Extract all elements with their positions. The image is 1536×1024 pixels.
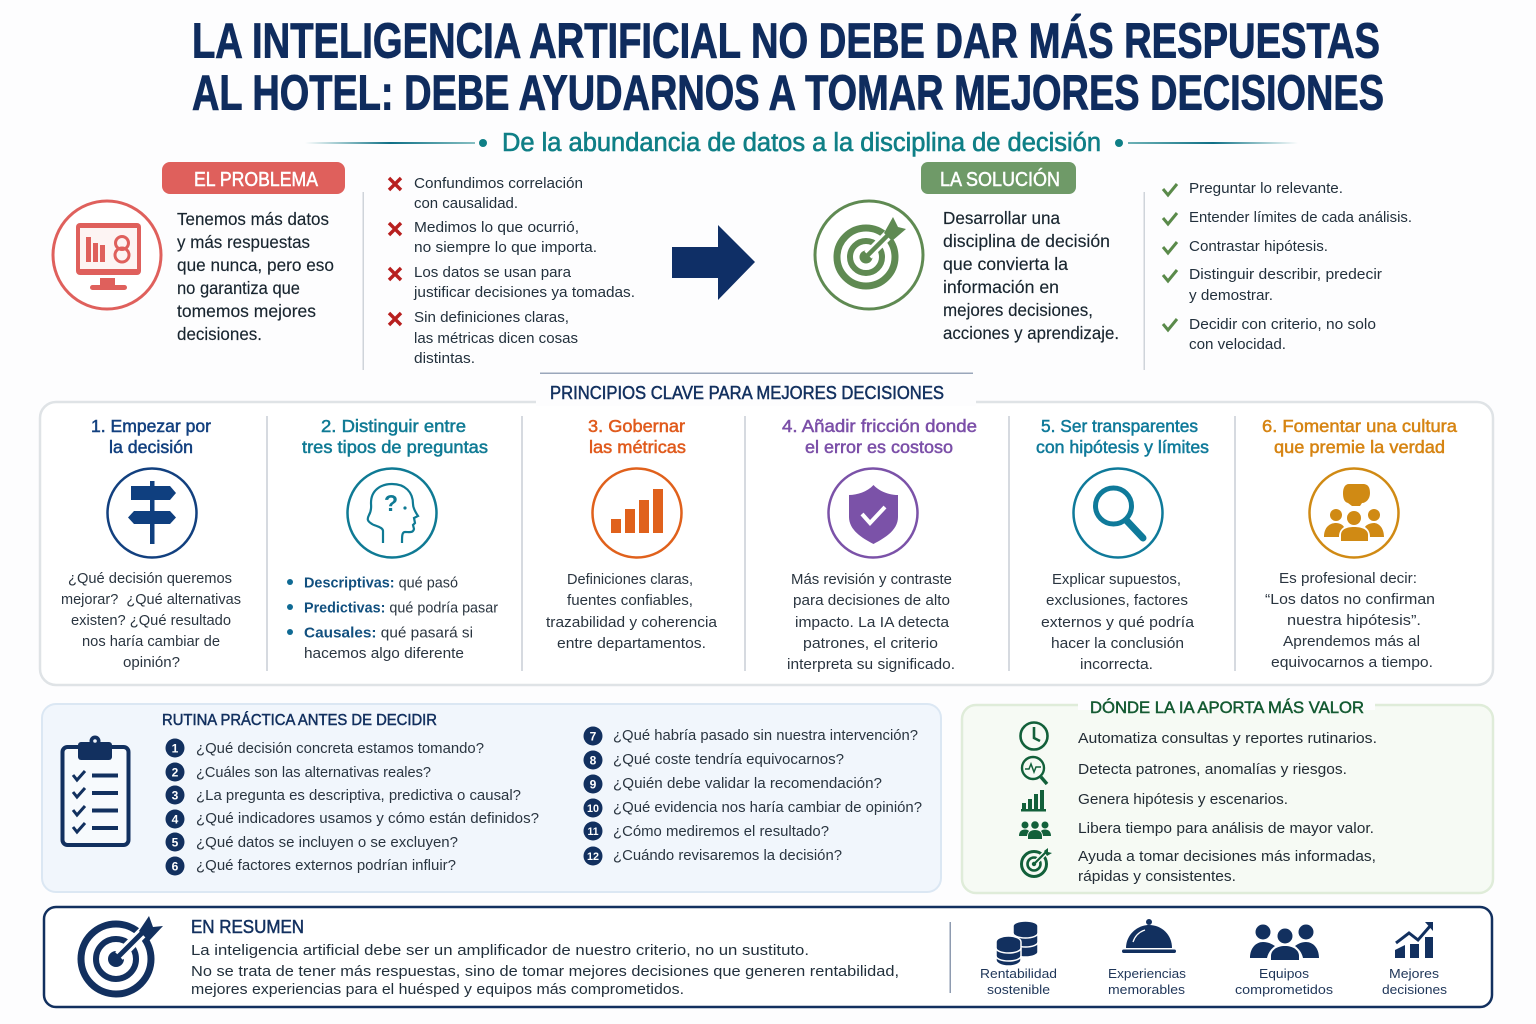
list: problem symptoms: con causalidad. [414,196,518,212]
icon: monitor with chart [53,201,161,309]
outcome: rentabilidad sostenible: Rentabilidad [980,966,1057,981]
icon: team with speech bubble [1310,468,1398,558]
panel: principios clave [40,372,1493,685]
list: questions 7 to 12: 7 [590,730,597,744]
list: ai value: rápidas y consistentes. [1078,868,1236,885]
list: solution actions: Decidir con criterio, no solo [1189,317,1376,333]
outcome: equipos comprometidos: comprometidos [1235,982,1334,997]
principle 1: existen? ¿Qué resultado [71,613,231,629]
solution description: que convierta la [943,254,1068,274]
principle 3: trazabilidad y coherencia [546,615,718,631]
principle 2: 2. Distinguir entre [321,416,466,436]
list: problem symptoms: distintas. [414,351,475,367]
list: questions 1 to 6: 6 [172,860,179,874]
problem description: que nunca, pero eso [177,255,334,275]
summary text: No se trata de tener más respuestas, sino de tomar mejores decisiones que generen rentabilidad, [191,963,899,980]
list: questions 1 to 6: 5 [172,836,179,850]
list: ai value: Detecta patrones, anomalías y riesgos. [1078,761,1347,778]
list: questions 7 to 12: ¿Qué evidencia nos haría cambiar de opinión? [613,800,922,816]
subtitle [305,129,1298,157]
principle 6: nuestra hipótesis”. [1287,613,1421,629]
problem description: Tenemos más datos [177,209,329,229]
summary text [191,917,899,998]
list: questions 1 to 6: ¿Qué indicadores usamos y cómo están definidos? [196,811,539,827]
problem description: no garantiza que [177,278,300,298]
panel: el problema [53,162,345,344]
list: questions 7 to 12: ¿Qué coste tendría equivocarnos? [613,752,844,768]
icon: clock [1020,722,1048,750]
summary text: mejores experiencias para el huésped y equipos más comprometidos. [191,981,684,998]
list: ai value [1078,730,1377,885]
principle 2: Descriptivas: qué pasó [304,576,458,592]
icon: navy target [81,916,163,994]
outcome: experiencias memorables: Experiencias [1108,966,1187,981]
list: questions 7 to 12: ¿Cuándo revisaremos la decisión? [613,848,842,864]
list: solution actions: Distinguir describir, predecir [1189,267,1382,283]
principle 5: incorrecta. [1080,657,1153,673]
outcome: equipos comprometidos [1235,924,1334,997]
list: questions 1 to 6 [166,738,539,876]
principle 5: externos y qué podría [1041,615,1195,631]
principle 4: impacto. La IA detecta [795,615,950,631]
list: questions 7 to 12: ¿Quién debe validar la recomendación? [613,776,882,792]
badge: el problema [162,162,345,194]
principle 3: fuentes confiables, [567,593,693,609]
arrow: problem to solution [672,225,755,300]
principle 3: Definiciones claras, [567,572,693,588]
list: questions 1 to 6: 3 [172,788,179,802]
principle 2: hacemos algo diferente [304,646,464,662]
icon: target with dart [815,201,923,309]
icon: head with question [348,468,436,558]
principle 6: que premie la verdad [1274,437,1445,457]
principle 5: Explicar supuestos, [1052,572,1181,588]
outcome: mejores decisiones: Mejores [1389,966,1440,981]
list: questions 1 to 6: 1 [172,742,179,756]
principle 1 [61,416,241,671]
panel: la solucion [815,162,1119,343]
icon: bar chart [1021,790,1046,812]
list: problem symptoms: las métricas dicen cosas [414,331,578,347]
principle 3: 3. Gobernar [588,416,685,436]
list: questions 1 to 6: 4 [172,812,179,826]
icon: magnifier [1074,468,1162,558]
icon: head with question: ? [384,490,398,516]
heading: rutina practica: RUTINA PRÁCTICA ANTES DE DECIDIR [162,710,437,729]
principle 6: “Los datos no confirman [1265,592,1435,608]
principle 2: Predictivas: qué podría pasar [304,600,498,616]
list: problem symptoms [389,176,635,367]
principle 6: 6. Fomentar una cultura [1262,416,1457,436]
principle 2: tres tipos de preguntas [302,437,488,457]
principle 4: para decisiones de alto [793,593,950,609]
title [192,14,1384,120]
list: questions 1 to 6: ¿Cuáles son las alternativas reales? [196,765,431,781]
subtitle: De la abundancia de datos a la disciplina de decisión [502,129,1101,157]
list: problem symptoms: Confundimos correlación [414,176,583,192]
principle 1: nos haría cambiar de [82,634,220,650]
principle 1: opinión? [123,655,180,671]
list: ai value: Libera tiempo para análisis de mayor valor. [1078,820,1374,837]
panel: rutina practica [42,704,941,892]
list: ai value: Automatiza consultas y reportes rutinarios. [1078,730,1377,747]
icon: small target [1022,848,1052,876]
list: solution actions: Contrastar hipótesis. [1189,239,1328,255]
summary text: EN RESUMEN [191,917,304,937]
principle 1: la decisión [109,437,193,457]
solution description: información en [943,277,1059,297]
principle 5 [1036,416,1209,673]
principle 6: Es profesional decir: [1279,571,1417,587]
badge: la solucion [921,162,1076,194]
list: ai value: Ayuda a tomar decisiones más informadas, [1078,848,1376,865]
principle 3: entre departamentos. [557,636,706,652]
outcome: experiencias memorables [1108,919,1187,997]
principle 2: Causales: qué pasará si [304,626,473,642]
icon: clipboard checklist [62,736,128,845]
list: problem symptoms: no siempre lo que importa. [414,240,597,256]
list: questions 7 to 12: 8 [590,754,597,768]
list: questions 1 to 6: ¿La pregunta es descriptiva, predictiva o causal? [196,788,521,804]
icon: team [1019,821,1051,839]
principle 1: ¿Qué decisión queremos [68,571,232,587]
principle 5: exclusiones, factores [1046,593,1188,609]
problem description [177,209,334,344]
solution description: acciones y aprendizaje. [943,323,1119,343]
principle 4: 4. Añadir fricción donde [782,416,977,436]
icon: shield with check [828,468,918,558]
list: questions 7 to 12: ¿Qué habría pasado sin nuestra intervención? [613,728,918,744]
outcome: rentabilidad sostenible: sostenible [987,982,1050,997]
list: questions 1 to 6: ¿Qué factores externos podrían influir? [196,858,456,874]
principle 6: equivocarnos a tiempo. [1271,655,1433,671]
outcome: rentabilidad sostenible [980,921,1057,997]
badge: la solucion: LA SOLUCIÓN [940,168,1060,191]
heading: donde la ia aporta: DÓNDE LA IA APORTA MÁS VALOR [1090,698,1364,717]
list: solution actions [1163,181,1412,353]
principle 3 [546,416,718,652]
principle 5: 5. Ser transparentes [1041,416,1198,436]
list: problem symptoms: justificar decisiones ya tomadas. [413,285,635,301]
outcome: mejores decisiones [1382,922,1448,997]
list: solution actions: Entender límites de cada análisis. [1189,210,1412,226]
list: questions 7 to 12: 9 [590,778,597,792]
list: questions 7 to 12: 10 [587,803,599,815]
list: questions 7 to 12 [584,726,922,866]
heading: principios clave: PRINCIPIOS CLAVE PARA MEJORES DECISIONES [550,383,944,403]
list: questions 7 to 12: 12 [587,851,599,863]
outcome: equipos comprometidos: Equipos [1259,966,1310,981]
principle 4 [782,416,977,673]
principle 4: patrones, el criterio [803,636,938,652]
list: problem symptoms: Los datos se usan para [414,265,572,281]
list: questions 7 to 12: 11 [588,826,598,838]
list: problem symptoms: Medimos lo que ocurrió, [414,220,579,236]
icon: signpost [108,468,196,558]
principle 3: las métricas [589,437,686,457]
principle 1: mejorar? ¿Qué alternativas [61,592,241,608]
principle 5: con hipótesis y límites [1036,437,1209,457]
list: questions 7 to 12: ¿Cómo mediremos el resultado? [613,824,829,840]
principle 4: Más revisión y contraste [791,572,952,588]
problem description: tomemos mejores [177,301,316,321]
problem description: decisiones. [177,324,262,344]
list: problem symptoms: Sin definiciones claras, [414,310,569,326]
list: solution actions: Preguntar lo relevante. [1189,181,1343,197]
panel: en resumen [44,907,1492,1007]
icon: magnifier with pulse [1022,757,1047,784]
list: solution actions: con velocidad. [1189,337,1286,353]
problem description: y más respuestas [177,232,310,252]
list: questions 1 to 6: ¿Qué decisión concreta estamos tomando? [196,741,484,757]
principle 1: 1. Empezar por [91,416,211,436]
solution description: Desarrollar una [943,208,1060,228]
solution description: mejores decisiones, [943,300,1093,320]
panel: donde la ia aporta mas valor [962,698,1493,893]
principle 6: Aprendemos más al [1283,634,1420,650]
solution description [943,208,1119,343]
list: ai value: Genera hipótesis y escenarios. [1078,791,1288,808]
principle 4: interpreta su significado. [787,657,955,673]
list: questions 1 to 6: 2 [172,766,179,780]
principle 6 [1262,416,1457,671]
icon: rising bars [592,468,682,558]
list: questions 1 to 6: ¿Qué datos se incluyen o se excluyen? [196,835,458,851]
list: solution actions: y demostrar. [1189,288,1273,304]
badge: el problema: EL PROBLEMA [194,169,319,191]
outcome: mejores decisiones: decisiones [1382,982,1448,997]
solution description: disciplina de decisión [943,231,1110,251]
summary text: La inteligencia artificial debe ser un amplificador de nuestro criterio, no un sustituto. [191,942,809,959]
principle 2 [287,416,498,662]
principle 5: hacer la conclusión [1051,636,1184,652]
principle 4: el error es costoso [805,437,953,457]
outcome: experiencias memorables: memorables [1108,982,1186,997]
